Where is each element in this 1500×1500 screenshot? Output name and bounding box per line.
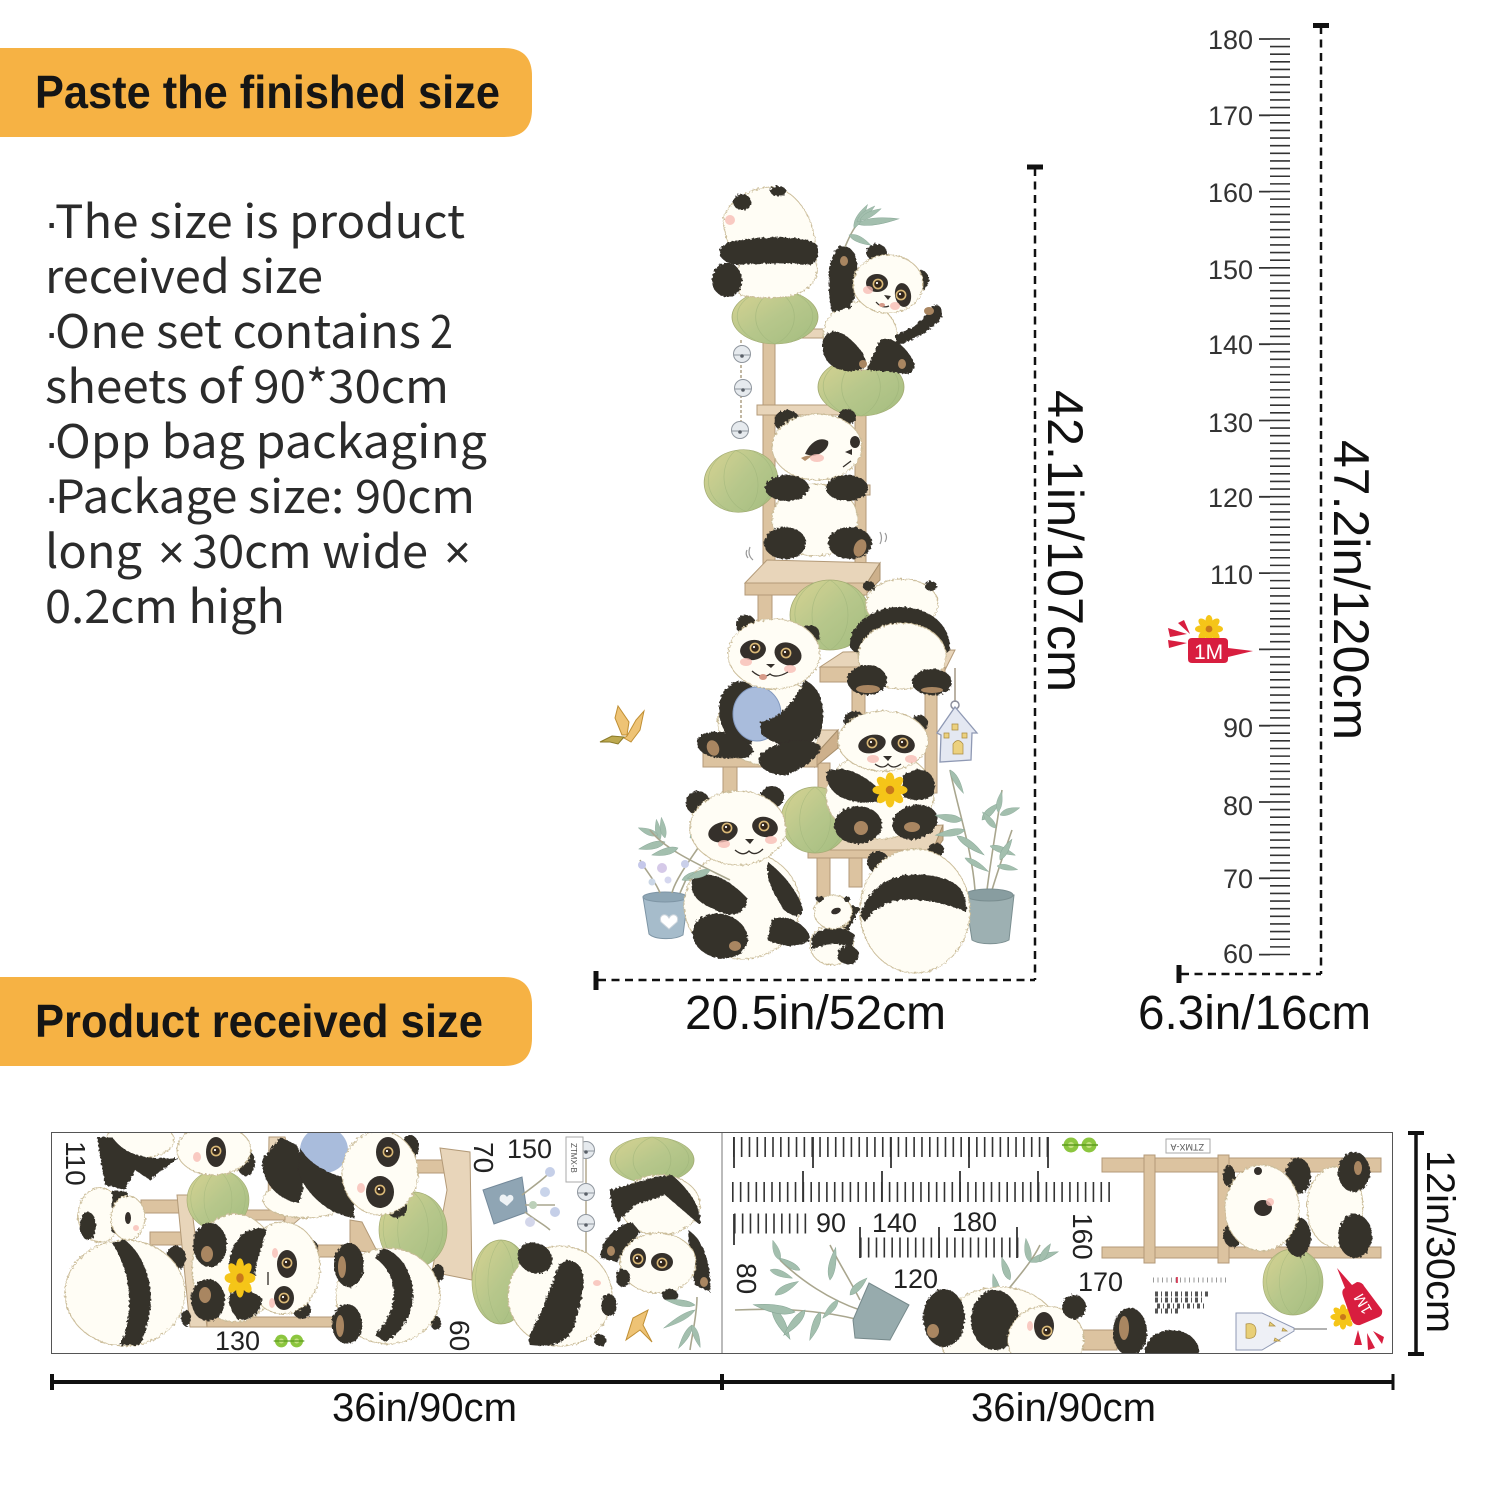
- illustration: panda stack on ladders and stools: [600, 186, 1021, 973]
- plant: bamboo sprig above raised paw: [845, 203, 899, 248]
- ruler numbers: 80: [1223, 791, 1253, 821]
- ruler numbers: 170: [1208, 101, 1253, 131]
- text block: product description: The size is product: [55, 186, 465, 252]
- ruler numbers: 130: [1208, 408, 1253, 438]
- text block: product description: Opp bag packaging: [55, 406, 487, 472]
- panda: small cub: [810, 895, 860, 965]
- text block: product description: One set contains: [55, 296, 421, 362]
- ruler numbers: 160: [1067, 1213, 1098, 1260]
- stool: second seat: [820, 650, 955, 793]
- ruler numbers: 120: [893, 1264, 938, 1294]
- ladder: sheet: [1102, 1155, 1381, 1263]
- text block: product description: long: [45, 516, 142, 582]
- panda: sheet flower: [191, 1214, 320, 1322]
- icon: 1M marker: [1168, 615, 1253, 664]
- icon: lantern: [937, 668, 977, 762]
- ruler numbers: 90: [816, 1208, 846, 1238]
- text block: product description: [44, 186, 487, 637]
- panda: sheet back lower: [332, 1243, 444, 1344]
- text block: product description: ·: [44, 471, 59, 523]
- ruler numbers: 80: [731, 1263, 762, 1294]
- label: panda height: 42.1in/107cm: [1037, 390, 1093, 692]
- panda: sheet big back: [65, 1240, 191, 1346]
- pumpkin: under climbing panda: [818, 358, 904, 416]
- label: ZTMX-B: ZTMX-B: [569, 1143, 578, 1173]
- icon: hanging bells: [732, 340, 752, 438]
- heading: paste the finished size: Paste the finished size: [35, 66, 500, 118]
- label: ruler width: 6.3in/16cm: [1138, 987, 1371, 1040]
- pumpkin: behind blue-ball panda: [790, 580, 870, 650]
- text block: product description: 30cm wide: [192, 516, 428, 582]
- pumpkin: left of ladder: [699, 444, 783, 518]
- ruler numbers: 160: [1208, 178, 1253, 208]
- pumpkins: [187, 1137, 694, 1324]
- sheet numbers: [60, 1134, 552, 1356]
- icon: sheet butterfly: [626, 1310, 652, 1342]
- plant: potted flowers left: [637, 819, 708, 939]
- stool: top seat: [745, 560, 880, 622]
- ruler numbers: 180: [1208, 25, 1253, 55]
- ruler numbers: 70: [1223, 864, 1253, 894]
- ruler strips: [732, 1137, 1111, 1258]
- panel: sticker sheets: [51, 1132, 1393, 1354]
- panda: back view upside down: [847, 579, 952, 695]
- ruler numbers: 90: [1223, 713, 1253, 743]
- sheet: left: [60, 1122, 710, 1356]
- plant: potted bamboo right: [935, 768, 1021, 944]
- plant: sheet pot and flowers: [483, 1167, 560, 1230]
- ruler numbers: 170: [1078, 1267, 1123, 1297]
- text block: product description: ×: [158, 526, 185, 578]
- text block: product description: 0.2cm high: [45, 571, 285, 637]
- panda: sheet back right: [508, 1237, 617, 1346]
- ruler numbers: [1208, 25, 1253, 969]
- icon: sheet bells: [578, 1142, 594, 1255]
- sheet numbers: 130: [215, 1326, 260, 1356]
- sheet: right: [732, 1137, 1384, 1353]
- sheet numbers: 70: [468, 1142, 499, 1173]
- text block: product description: ×: [444, 526, 471, 578]
- text block: product description: sheets of 90*30cm: [45, 351, 449, 417]
- panda: sheet bottom: [922, 1286, 1200, 1353]
- panda: holding flower: [826, 711, 942, 844]
- ruler numbers: 110: [1210, 560, 1253, 590]
- label: ruler height: 47.2in/120cm: [1323, 440, 1379, 740]
- pumpkin: bottom: [781, 787, 849, 853]
- label: ZTMX-B: [566, 1137, 583, 1182]
- dimension: sheet height: [1408, 1133, 1462, 1354]
- ruler numbers: 140: [1208, 330, 1253, 360]
- banner: product received size: [0, 977, 532, 1066]
- label: sheet 1 width: 36in/90cm: [332, 1386, 517, 1430]
- panda: sheet cub: [78, 1188, 145, 1242]
- icon: butterfly: [600, 706, 644, 744]
- ruler numbers: 140: [872, 1208, 917, 1238]
- dimension: sheet 1 width: [51, 1374, 722, 1430]
- ruler numbers: 180: [952, 1207, 997, 1237]
- wood parts: [141, 1137, 472, 1327]
- sheet numbers: 110: [60, 1141, 91, 1186]
- text block: product description: ·: [44, 416, 59, 468]
- text block: product description: Package size: 90cm: [55, 461, 475, 527]
- heading: product received size: Product received size: [35, 995, 483, 1047]
- icon: sheet 1M marker: 1M: [1351, 1290, 1376, 1317]
- plant: sheet pot: [735, 1238, 1059, 1341]
- panda: sheet on ladder: [1223, 1152, 1372, 1258]
- text block: product description: ·: [44, 196, 59, 248]
- ruler: height scale: [1208, 25, 1280, 969]
- text block: product description: 2: [430, 296, 453, 362]
- pumpkin: sheet: [1263, 1249, 1323, 1315]
- panda: sheet upside down: [600, 1175, 710, 1301]
- label: panda width: 20.5in/52cm: [685, 987, 946, 1040]
- ruler numbers: 60: [1223, 939, 1253, 969]
- stool: third seat: [703, 730, 838, 793]
- label: sheet height: 12in/30cm: [1418, 1150, 1462, 1333]
- panda: climbing with raised arm: [822, 244, 942, 374]
- panda: holding blue ball: [697, 615, 823, 775]
- label: ZTMX-A: [1166, 1139, 1210, 1153]
- icon: 1M marker: 1M: [1194, 641, 1223, 664]
- mini ruler and tiny print: [1153, 1277, 1227, 1311]
- ruler numbers: [736, 1212, 1122, 1294]
- icon: sheet 1M marker: [1330, 1268, 1384, 1350]
- label: ZTMX-A: ZTMX-A: [1170, 1142, 1204, 1152]
- icon: sheet lantern: [1236, 1313, 1327, 1350]
- pumpkin: top: [732, 290, 818, 344]
- plant: sheet sprig: [663, 1297, 703, 1350]
- panda: sitting bottom left: [650, 786, 810, 964]
- sheet numbers: 60: [444, 1320, 475, 1351]
- banner: paste the finished size: [0, 48, 532, 137]
- stool: bottom seat: [808, 825, 943, 897]
- panda: sheet top left fragments: [96, 1133, 256, 1190]
- text block: product description: received size: [45, 241, 323, 307]
- panda: sheet blue ball: [262, 1127, 419, 1218]
- panda: back view on top: [712, 186, 818, 298]
- panda: hanging on ladder: [746, 409, 886, 560]
- label: sheet 2 width: 36in/90cm: [971, 1386, 1156, 1430]
- ruler numbers: 120: [1208, 483, 1253, 513]
- candies: [1062, 1138, 1098, 1152]
- sheet numbers: 150: [507, 1134, 552, 1164]
- ladder: [757, 329, 870, 568]
- ruler numbers: 150: [1208, 255, 1253, 285]
- text block: product description: ·: [44, 306, 59, 358]
- panda: big back view: [860, 843, 970, 973]
